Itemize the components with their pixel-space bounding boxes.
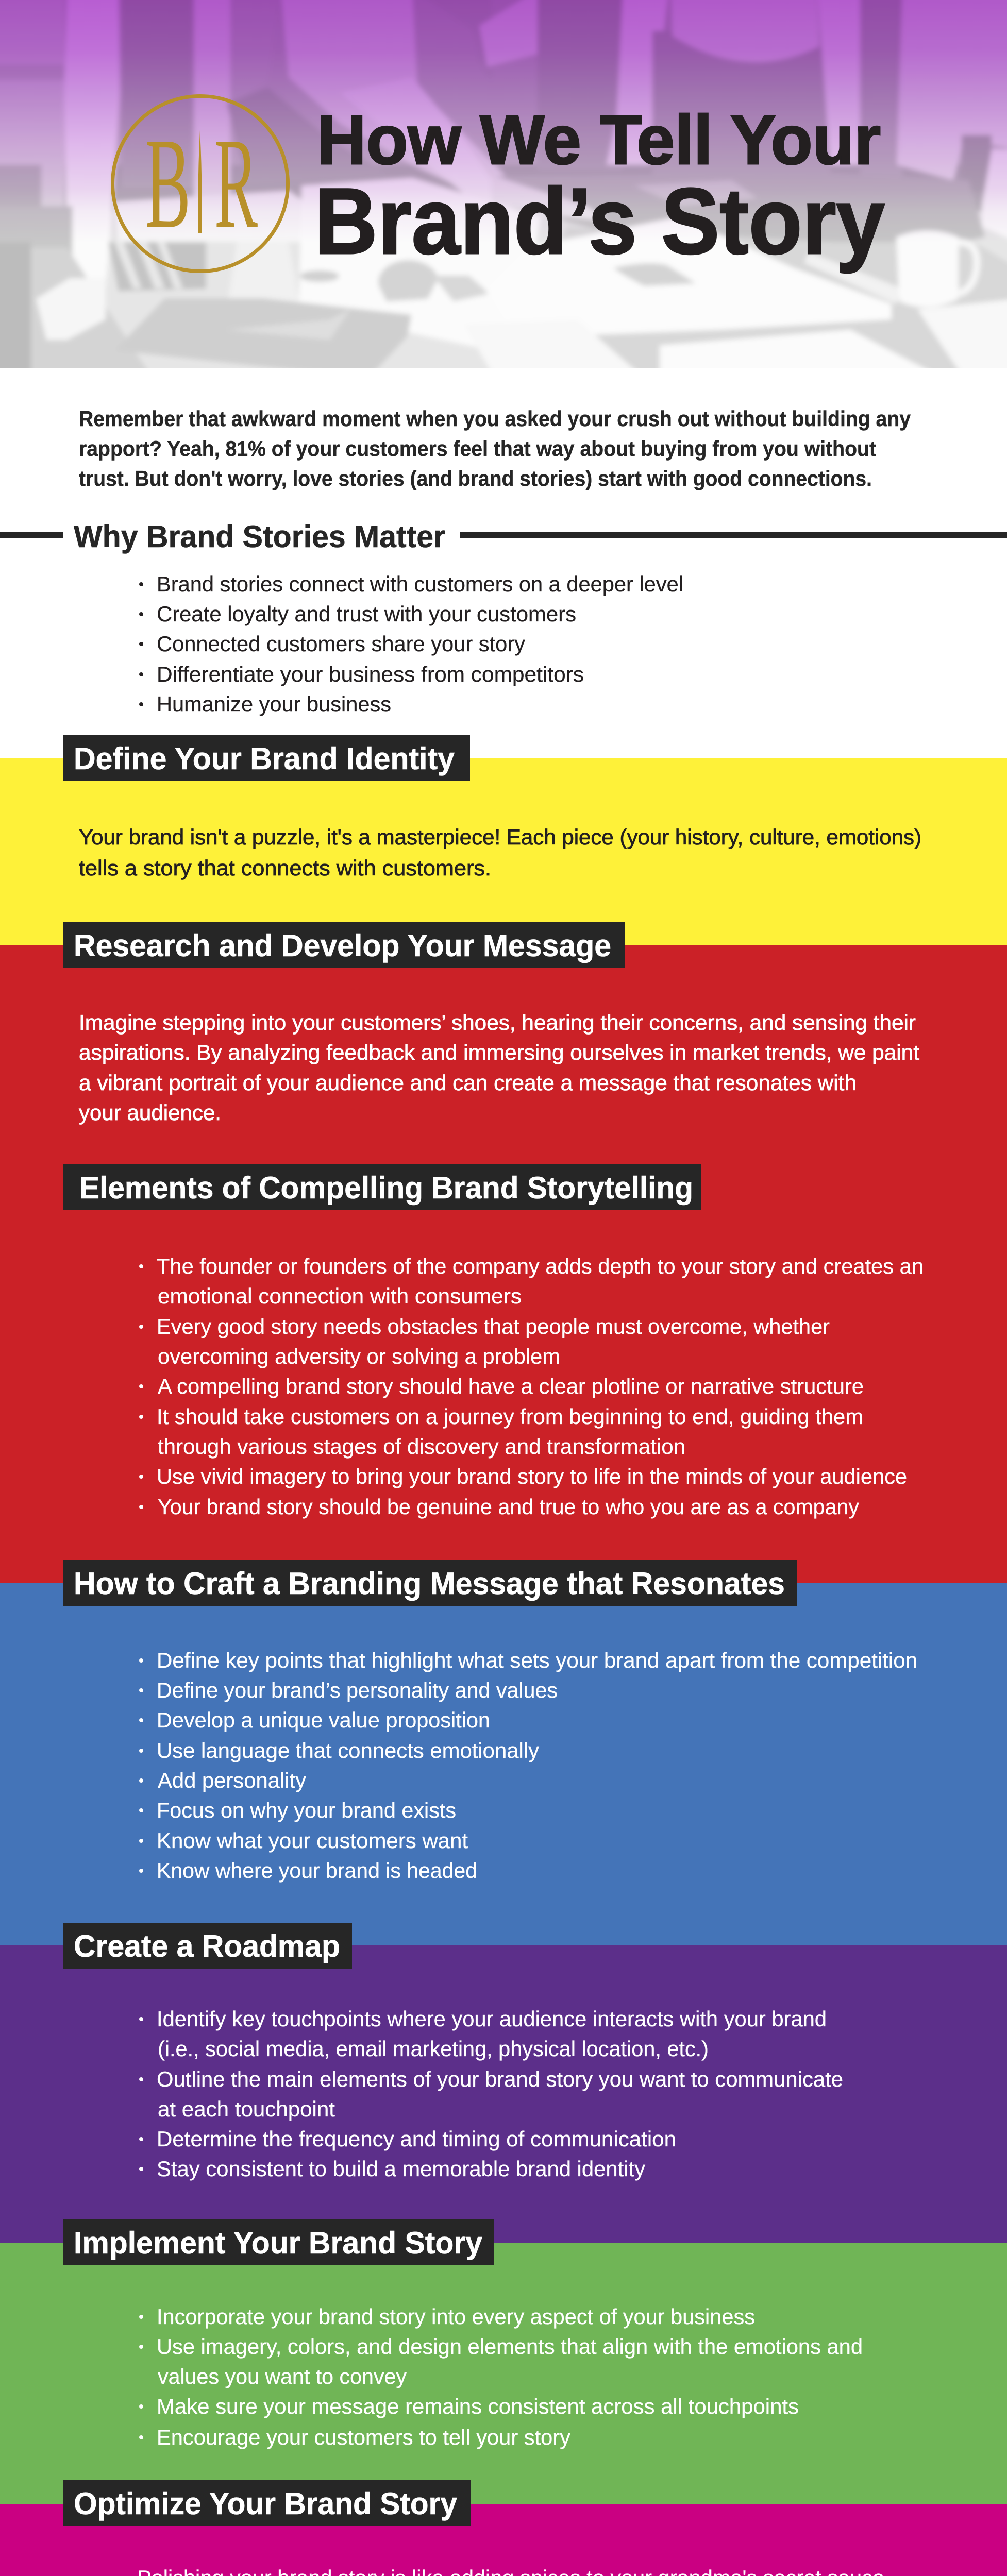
- heading: how to craft a branding message that resonates: How to Craft a Branding Message that Resonates: [74, 1566, 785, 1601]
- text: research paragraph: aspirations. By analyzing feedback and immersing ourselves in market trends, we paint: [79, 1040, 919, 1064]
- heading: elements of compelling brand storytelling: Elements of Compelling Brand Storytelling: [79, 1171, 693, 1205]
- bullet list: implement: Encourage your customers to tell your story: [157, 2425, 570, 2449]
- bullet list: why brand stories matter: Connected customers share your story: [157, 632, 525, 656]
- panel: define your brand identity: [0, 735, 1007, 945]
- bullet list: why brand stories matter: Brand stories connect with customers on a deeper level: [157, 572, 683, 596]
- heading: research and develop your message: Research and Develop Your Message: [74, 928, 611, 963]
- bullet list: elements: overcoming adversity or solving a problem: [158, 1344, 560, 1368]
- bullet list: elements: The founder or founders of the company adds depth to your story and creates an: [157, 1254, 924, 1278]
- bullet list: roadmap: Stay consistent to build a memorable brand identity: [157, 2157, 645, 2181]
- bullet list: craft: Define key points that highlight what sets your brand apart from the competition: [157, 1648, 917, 1672]
- title: [314, 101, 885, 274]
- bullet list: elements: through various stages of discovery and transformation: [158, 1434, 685, 1459]
- bullet list: implement: Incorporate your brand story into every aspect of your business: [157, 2304, 755, 2329]
- bullet list: why brand stories matter: [139, 572, 683, 716]
- icon: BR logo: B: [145, 111, 191, 255]
- bullet list: implement: Make sure your message remains consistent across all touchpoints: [157, 2394, 799, 2418]
- bullet list: craft: Use language that connects emotionally: [157, 1738, 539, 1762]
- bullet list: roadmap: Determine the frequency and timing of communication: [157, 2127, 676, 2151]
- bullet list: elements: [139, 1254, 924, 1519]
- heading: optimize your brand story: Optimize Your Brand Story: [74, 2486, 458, 2521]
- hero banner: [0, 0, 1007, 381]
- bullet list: elements: Your brand story should be genuine and true to who you are as a company: [158, 1495, 859, 1519]
- heading: create a roadmap: Create a Roadmap: [74, 1929, 340, 1963]
- bullet list: craft: Focus on why your brand exists: [157, 1798, 456, 1822]
- bullet list: implement: [139, 2304, 863, 2449]
- bullet list: craft: Know what your customers want: [157, 1828, 468, 1853]
- intro paragraph: trust. But don't worry, love stories (and brand stories) start with good connections.: [79, 466, 872, 490]
- panel: create a roadmap: [0, 1923, 1007, 2243]
- panel: optimize your brand story: [0, 2480, 1007, 2576]
- intro paragraph: rapport? Yeah, 81% of your customers feel that way about buying from you without: [79, 436, 876, 461]
- bullet list: roadmap: Outline the main elements of your brand story you want to communicate: [157, 2067, 843, 2091]
- bullet list: implement: Use imagery, colors, and design elements that align with the emotions and: [157, 2334, 863, 2359]
- text: research paragraph: [79, 1010, 919, 1125]
- bullet list: craft: Add personality: [158, 1768, 306, 1792]
- icon: BR logo: R: [214, 111, 258, 255]
- bullet list: roadmap: [139, 2007, 843, 2181]
- bullet list: elements: emotional connection with consumers: [158, 1284, 522, 1308]
- title: How We Tell Your: [317, 101, 881, 179]
- bullet list: roadmap: at each touchpoint: [158, 2097, 335, 2121]
- text: research paragraph: a vibrant portrait of your audience and can create a message that resonates with: [79, 1071, 857, 1095]
- intro paragraph: [79, 406, 911, 490]
- bullet list: elements: Every good story needs obstacles that people must overcome, whether: [157, 1314, 830, 1338]
- bullet list: craft: Know where your brand is headed: [157, 1858, 477, 1883]
- title: Brand’s Story: [314, 168, 885, 274]
- bullet list: why brand stories matter: Humanize your business: [157, 692, 391, 716]
- heading: implement your brand story: Implement Your Brand Story: [74, 2226, 483, 2260]
- bullet list: craft: Define your brand’s personality and values: [157, 1678, 558, 1702]
- panel: why brand stories matter: [0, 519, 1007, 716]
- bullet list: why brand stories matter: Create loyalty and trust with your customers: [157, 602, 576, 626]
- bullet list: craft: Develop a unique value proposition: [157, 1708, 490, 1732]
- intro paragraph: Remember that awkward moment when you asked your crush out without building any: [79, 406, 911, 431]
- hero photo of team at a table: [0, 0, 1007, 381]
- heading: why brand stories matter: Why Brand Stories Matter: [74, 519, 445, 554]
- bullet list: elements: Use vivid imagery to bring your brand story to life in the minds of your audience: [157, 1464, 907, 1488]
- table and desk items: [0, 204, 74, 254]
- bullet list: craft: [139, 1648, 917, 1883]
- bullet list: why brand stories matter: Differentiate your business from competitors: [157, 662, 584, 686]
- heading: define your brand identity: Define Your Brand Identity: [74, 741, 455, 776]
- bullet list: implement: values you want to convey: [158, 2364, 407, 2388]
- bullet list: elements: It should take customers on a journey from beginning to end, guiding them: [157, 1404, 863, 1429]
- text: define your brand identity: Your brand isn't a puzzle, it's a masterpiece! Each piece (your history, culture, emotions): [79, 825, 921, 849]
- text: define your brand identity: tells a story that connects with customers.: [79, 856, 491, 880]
- bullet list: elements: A compelling brand story should have a clear plotline or narrative structure: [158, 1374, 864, 1398]
- icon: BR logo: [112, 96, 288, 271]
- text: research paragraph: your audience.: [79, 1100, 221, 1125]
- text: research paragraph: Imagine stepping into your customers’ shoes, hearing their concerns, and sensing their: [79, 1010, 916, 1035]
- bullet list: roadmap: Identify key touchpoints where your audience interacts with your brand: [157, 2007, 827, 2031]
- bullet list: roadmap: (i.e., social media, email marketing, physical location, etc.): [158, 2037, 709, 2061]
- purple gradient overlay: [0, 0, 1007, 226]
- panel: implement your brand story: [0, 2219, 1007, 2504]
- text: define your brand identity: [79, 825, 921, 880]
- panel: research and elements: [0, 922, 1007, 1583]
- panel: how to craft a branding message: [0, 1560, 1007, 1945]
